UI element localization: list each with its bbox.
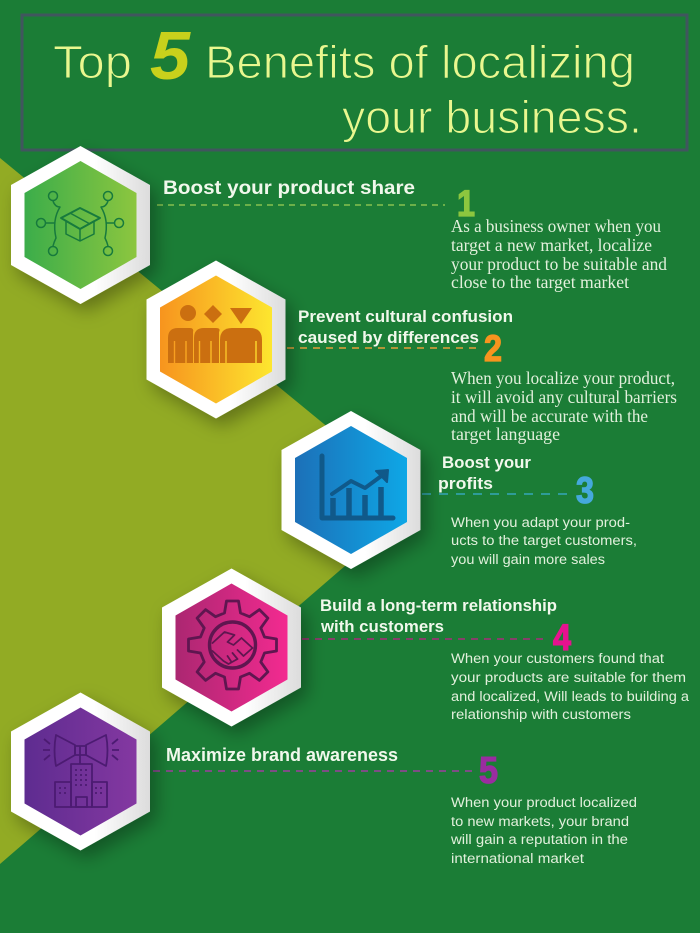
hexagon 4: relationship xyxy=(162,568,301,726)
title line two: your business. xyxy=(342,91,642,143)
description 5: will gain a reputation in the xyxy=(450,832,628,847)
description 2: it will avoid any cultural barriers xyxy=(451,387,677,407)
number 4: 4 xyxy=(553,617,571,658)
title number 5: 5 xyxy=(150,18,191,94)
description 3: When you adapt your prod- xyxy=(451,515,630,530)
description 1: your product to be suitable and xyxy=(451,254,667,274)
description 2: When you localize your product, xyxy=(451,368,675,388)
hexagon 5: brand awareness xyxy=(11,692,150,850)
dashed connector 5 xyxy=(153,770,478,772)
heading 3: Boost your xyxy=(442,453,531,472)
title line one: Top xyxy=(53,36,132,88)
icon: megaphones over buildings xyxy=(43,735,119,807)
description 1: target a new market, localize xyxy=(451,235,652,255)
hexagon 2: cultural confusion xyxy=(146,260,286,418)
heading 2: Prevent cultural confusion xyxy=(298,307,513,326)
description 5: to new markets, your brand xyxy=(451,814,629,829)
number 3: 3 xyxy=(576,470,594,511)
heading 4: Build a long-term relationship xyxy=(320,596,557,615)
icon: growth chart xyxy=(322,456,393,518)
dashed connector 3 xyxy=(422,493,572,495)
description 3: ucts to the target customers, xyxy=(451,533,637,548)
heading 3 xyxy=(438,453,531,493)
description 4: When your customers found that xyxy=(451,651,664,666)
dashed connector 2 xyxy=(287,347,478,349)
heading 2: caused by differences xyxy=(298,328,479,347)
heading 2 xyxy=(298,307,513,347)
number 1: 1 xyxy=(457,183,475,224)
heading 3: profits xyxy=(438,474,493,493)
description 4: and localized, Will leads to building a xyxy=(451,689,690,704)
hexagon 1: product share xyxy=(11,146,150,304)
description 4: relationship with customers xyxy=(451,707,631,722)
icon: gear with handshake xyxy=(188,601,276,689)
icon: three people with shapes xyxy=(168,305,262,363)
description 3: you will gain more sales xyxy=(451,552,605,567)
description 1: close to the target market xyxy=(451,272,629,292)
description 5: international market xyxy=(451,851,584,866)
heading 4 xyxy=(320,596,557,636)
icon: box with network nodes xyxy=(36,192,124,256)
number 5: 5 xyxy=(479,750,498,791)
number 2: 2 xyxy=(484,328,502,369)
olive arrow shape xyxy=(0,158,419,864)
title panel xyxy=(22,15,687,150)
description 2: and will be accurate with the xyxy=(451,406,648,426)
dashed connector 1 xyxy=(157,204,445,206)
description 5 xyxy=(450,795,637,866)
dashed connector 4 xyxy=(302,638,548,640)
description 1: As a business owner when you xyxy=(451,216,661,236)
description 4 xyxy=(451,651,690,722)
heading 5: Maximize brand awareness xyxy=(166,744,398,765)
description 4: your products are suitable for them xyxy=(451,670,686,685)
heading 1: Boost your product share xyxy=(163,177,415,199)
title line one continued: Benefits of localizing xyxy=(205,36,635,88)
description 5: When your product localized xyxy=(451,795,637,810)
description 1 xyxy=(451,216,667,292)
description 2: target language xyxy=(451,424,560,444)
hexagon 3: profits xyxy=(282,411,420,569)
description 3 xyxy=(451,515,637,567)
description 2 xyxy=(451,368,677,444)
heading 4: with customers xyxy=(320,617,444,636)
